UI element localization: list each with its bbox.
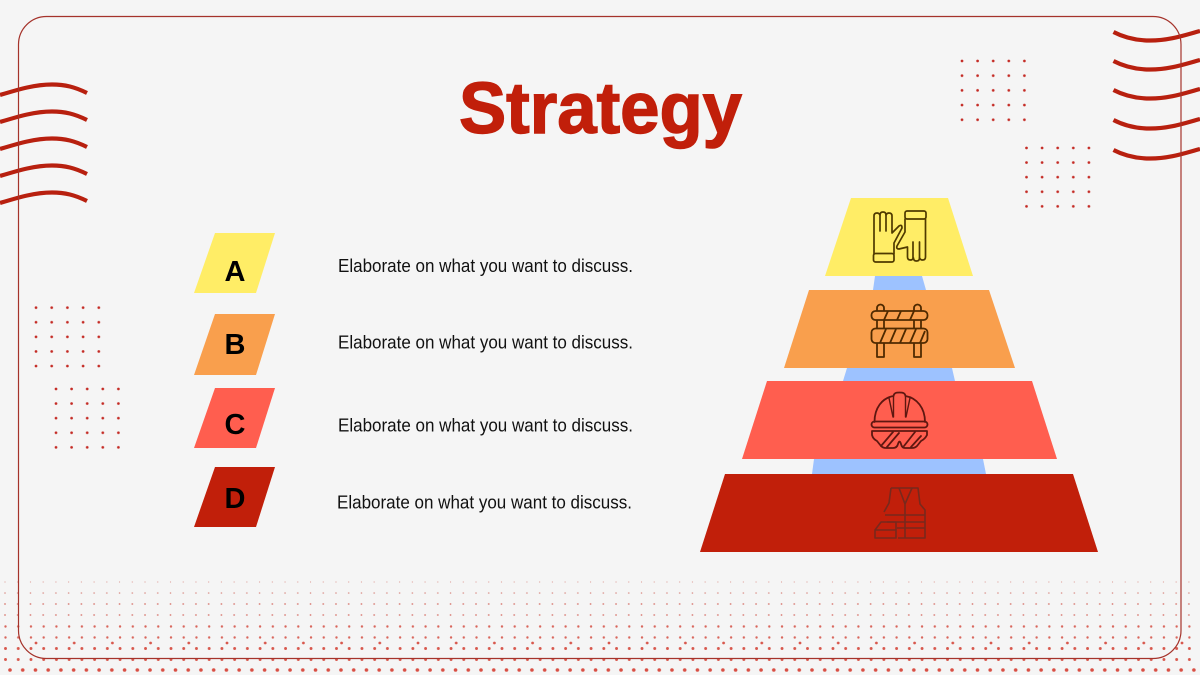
icon: gloves	[874, 211, 926, 262]
text C: Elaborate on what you want to discuss.	[338, 414, 633, 436]
tier 1 yellow	[825, 198, 973, 276]
dot grid: top right lower	[1025, 146, 1091, 208]
dot grid: left upper	[34, 306, 101, 368]
list row B	[194, 314, 633, 375]
badge A	[194, 233, 275, 293]
title: Strategy	[459, 69, 742, 149]
text A: Elaborate on what you want to discuss.	[338, 255, 633, 276]
letter A: A	[225, 256, 246, 288]
icon: road barrier	[872, 305, 928, 357]
icon: hard hat and goggles	[872, 392, 928, 448]
letter D: D	[225, 483, 245, 515]
left wavy lines	[0, 84, 87, 203]
text B: Elaborate on what you want to discuss.	[338, 332, 633, 352]
dot grid: top right upper	[960, 59, 1027, 122]
pyramid	[700, 198, 1098, 552]
tier 4 dark red	[700, 474, 1098, 552]
text D: Elaborate on what you want to discuss.	[337, 492, 632, 512]
list row A	[194, 233, 633, 293]
right wavy lines	[1114, 31, 1200, 158]
tier 2 orange	[784, 290, 1015, 368]
badge B	[194, 314, 275, 375]
dot grid: left lower	[54, 387, 120, 449]
halftone dot band along the bottom	[0, 581, 1200, 672]
letter B: B	[225, 329, 245, 361]
list row C	[194, 388, 633, 448]
tier 3 red	[742, 381, 1057, 459]
badge D	[194, 467, 275, 527]
letter C: C	[225, 409, 246, 441]
badge C	[194, 388, 275, 448]
list row D	[194, 467, 632, 527]
icon: safety vest	[875, 488, 925, 538]
blue connectors	[812, 276, 986, 474]
